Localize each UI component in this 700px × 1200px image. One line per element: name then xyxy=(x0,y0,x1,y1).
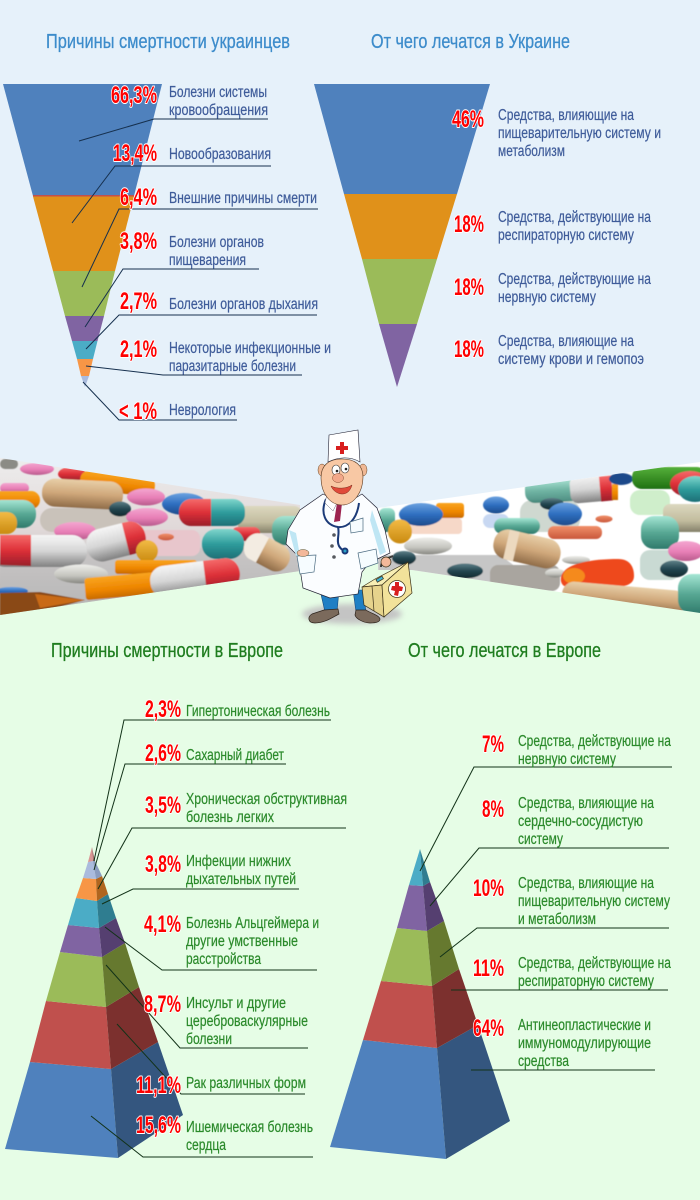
labels: causes of death in Ukraine: 3,8% xyxy=(120,228,157,255)
buttons xyxy=(330,533,336,559)
labels: causes of death in Ukraine xyxy=(111,82,331,425)
labels: treatments in Europe: 64% xyxy=(473,1015,504,1042)
trousers xyxy=(320,590,366,612)
labels: causes of death in Ukraine: Неврология xyxy=(169,402,236,419)
white coat xyxy=(286,494,390,598)
labels: causes of death in Europe: Рак различных форм xyxy=(186,1075,306,1092)
bottom background xyxy=(0,560,700,1200)
labels: treatments in Europe: иммуномодулирующие xyxy=(518,1035,651,1052)
labels: treatments in Ukraine xyxy=(452,106,661,368)
labels: causes of death in Europe: Гипертоническая болезнь xyxy=(186,703,330,720)
chart: pyramid of treatments in Europe xyxy=(330,767,672,1159)
chart: pyramid of causes of death in Europe xyxy=(5,720,346,1158)
labels: treatments in Europe: Средства, влияющие на xyxy=(518,795,654,812)
labels: causes of death in Ukraine: Болезни системы xyxy=(169,84,267,101)
labels: causes of death in Europe: цереброваскулярные xyxy=(186,1013,308,1030)
labels: causes of death in Europe: 2,3% xyxy=(145,696,181,723)
labels: causes of death in Ukraine: 13,4% xyxy=(113,140,157,167)
labels: causes of death in Ukraine: Некоторые инфекционные и xyxy=(169,340,331,357)
labels: treatments in Europe: 10% xyxy=(473,875,504,902)
labels: treatments in Europe: 7% xyxy=(482,731,504,758)
head xyxy=(318,459,367,505)
labels: causes of death in Europe: 3,5% xyxy=(145,792,181,819)
labels: treatments in Europe: сердечно-сосудистую xyxy=(518,813,643,830)
labels: causes of death in Ukraine: Новообразования xyxy=(169,146,271,163)
photo band: pills right xyxy=(375,455,700,620)
labels: treatments in Ukraine: Средства, влияющие на xyxy=(498,333,634,350)
labels: treatments in Europe: средства xyxy=(518,1053,569,1070)
labels: causes of death in Ukraine: 66,3% xyxy=(111,82,157,109)
shadow xyxy=(302,604,402,624)
title: causes of death in Europe: Причины смертности в Европе xyxy=(51,639,283,662)
labels: treatments in Ukraine: 46% xyxy=(452,106,484,133)
pockets xyxy=(297,518,378,574)
labels: treatments in Ukraine: метаболизм xyxy=(498,143,565,160)
left hand xyxy=(297,550,309,556)
chart: funnel of causes of death in Ukraine xyxy=(3,84,318,420)
briefcase xyxy=(362,556,412,617)
labels: causes of death in Ukraine: паразитарные болезни xyxy=(169,358,296,375)
labels: causes of death in Europe: Хроническая обструктивная xyxy=(186,791,347,808)
title: causes of death in Ukraine: Причины смертности украинцев xyxy=(46,30,290,53)
labels: causes of death in Europe: 4,1% xyxy=(144,911,181,938)
labels: treatments in Europe: систему xyxy=(518,831,563,848)
labels: treatments in Ukraine: нервную систему xyxy=(498,289,596,306)
labels: treatments in Europe: 8% xyxy=(482,796,504,823)
title: treatments in Europe: От чего лечатся в Европе xyxy=(408,639,601,662)
coat shading xyxy=(289,510,386,556)
labels: causes of death in Europe: Инфекции нижних xyxy=(186,853,291,870)
illustration: doctor with medical case xyxy=(286,430,412,624)
labels: causes of death in Europe: Болезнь Альцгеймера и xyxy=(186,915,319,932)
labels: causes of death in Ukraine: Болезни органов дыхания xyxy=(169,296,318,313)
chart: funnel of treatments in Ukraine xyxy=(314,84,490,387)
photo band: pills left xyxy=(0,455,308,620)
labels: treatments in Europe: Антинеопластические и xyxy=(518,1017,651,1034)
labels: causes of death in Europe: 3,8% xyxy=(145,851,181,878)
leader lines xyxy=(420,767,672,1070)
labels: causes of death in Ukraine: Внешние причины смерти xyxy=(169,190,317,207)
labels: treatments in Ukraine: Средства, действующие на xyxy=(498,209,651,226)
shirt collar xyxy=(325,494,337,511)
labels: treatments in Europe: и метаболизм xyxy=(518,911,596,928)
stethoscope xyxy=(323,499,359,554)
labels: treatments in Ukraine: 18% xyxy=(454,274,484,301)
hat with red cross xyxy=(328,430,360,462)
labels: treatments in Ukraine: респираторную систему xyxy=(498,227,634,244)
labels: causes of death in Europe: 11,1% xyxy=(136,1072,181,1099)
labels: causes of death in Europe: сердца xyxy=(186,1137,226,1154)
labels: treatments in Europe: нервную систему xyxy=(518,751,616,768)
labels: treatments in Ukraine: Средства, действующие на xyxy=(498,271,651,288)
labels: causes of death in Europe xyxy=(136,696,347,1154)
labels: causes of death in Europe: 15,6% xyxy=(136,1112,181,1139)
title: treatments in Ukraine: От чего лечатся в Украине xyxy=(371,30,570,53)
leader lines xyxy=(72,119,318,420)
labels: causes of death in Europe: расстройства xyxy=(186,951,261,968)
labels: treatments in Ukraine: 18% xyxy=(454,336,484,363)
labels: causes of death in Europe: 2,6% xyxy=(145,740,181,767)
labels: treatments in Europe: респираторную систему xyxy=(518,973,654,990)
labels: treatments in Europe: 11% xyxy=(473,955,504,982)
labels: treatments in Ukraine: пищеварительную систему и xyxy=(498,125,661,142)
labels: treatments in Ukraine: 18% xyxy=(454,211,484,238)
labels: treatments in Ukraine: систему крови и гемопоэ xyxy=(498,351,644,368)
labels: causes of death in Europe: Сахарный диабет xyxy=(186,747,284,764)
labels: causes of death in Europe: 8,7% xyxy=(144,991,181,1018)
labels: causes of death in Europe: Инсульт и другие xyxy=(186,995,286,1012)
tie xyxy=(334,503,342,522)
labels: causes of death in Europe: Ишемическая болезнь xyxy=(186,1119,313,1136)
labels: causes of death in Europe: болезнь легких xyxy=(186,809,274,826)
labels: causes of death in Ukraine: Болезни органов xyxy=(169,234,264,251)
labels: treatments in Europe: Средства, влияющие на xyxy=(518,875,654,892)
labels: causes of death in Ukraine: 2,7% xyxy=(120,288,157,315)
shoes xyxy=(309,609,380,623)
labels: treatments in Ukraine: Средства, влияющие на xyxy=(498,107,634,124)
top background xyxy=(0,0,700,560)
labels: causes of death in Ukraine: кровообращения xyxy=(169,102,268,119)
labels: causes of death in Ukraine: 2,1% xyxy=(120,336,157,363)
labels: causes of death in Europe: дыхательных путей xyxy=(186,871,296,888)
leader lines xyxy=(91,720,346,1157)
labels: causes of death in Ukraine: < 1% xyxy=(119,398,157,425)
labels: causes of death in Ukraine: 6,4% xyxy=(120,184,157,211)
labels: causes of death in Ukraine: пищеварения xyxy=(169,252,246,269)
labels: causes of death in Europe: болезни xyxy=(186,1031,232,1048)
labels: treatments in Europe xyxy=(473,731,671,1070)
labels: causes of death in Europe: другие умственные xyxy=(186,933,298,950)
